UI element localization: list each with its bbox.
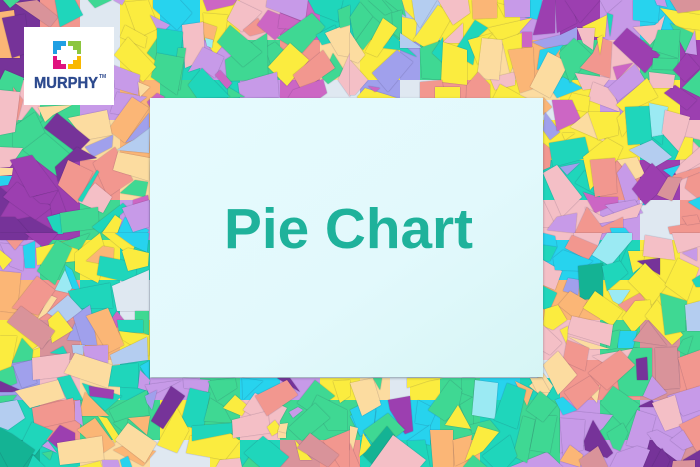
icon: four coloured squares with white cross bbox=[53, 41, 81, 69]
white card bbox=[150, 98, 543, 377]
title: Pie Chart: Pie Chart bbox=[224, 197, 473, 261]
trademark: TM bbox=[99, 74, 106, 80]
logo: Murphy bbox=[24, 27, 114, 105]
wordmark: MURPHY: MURPHY bbox=[34, 75, 99, 92]
